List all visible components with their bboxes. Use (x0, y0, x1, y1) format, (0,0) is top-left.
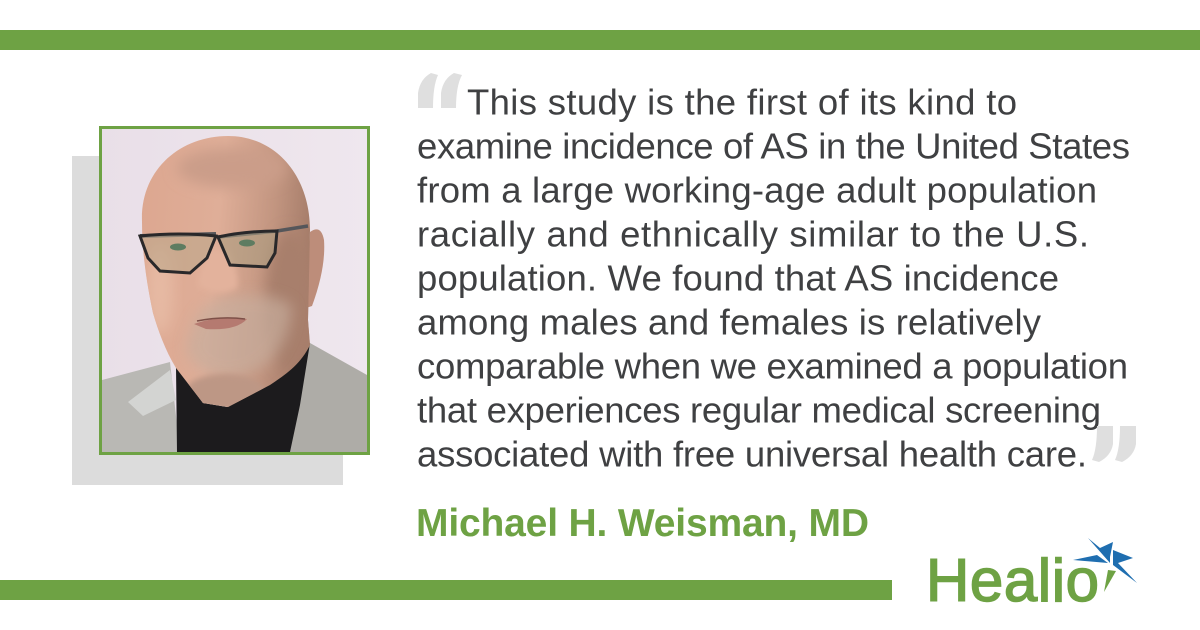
closing quotation mark (1092, 426, 1136, 462)
quote text: comparable when we examined a population (417, 346, 1128, 386)
quote text: that experiences regular medical screening (417, 390, 1101, 430)
top green bar (0, 30, 1200, 50)
opening quotation mark (418, 73, 462, 108)
quote text: from a large working-age adult population (417, 170, 1097, 210)
portrait photo of Michael H. Weisman (100, 128, 368, 454)
Healio logo (926, 538, 1137, 614)
quote text: among males and females is relatively (417, 302, 1042, 342)
quote text: racially and ethnically similar to the U.S. (417, 214, 1089, 254)
logo star (1073, 538, 1137, 592)
quote text: examine incidence of AS in the United States (417, 126, 1130, 166)
quote text (417, 82, 1130, 474)
bottom green bar (0, 580, 892, 600)
gray offset panel behind portrait (72, 156, 343, 485)
attribution name: Michael H. Weisman, MD (416, 502, 869, 545)
quote text: This study is the first of its kind to (467, 82, 1017, 122)
quote text: population. We found that AS incidence (417, 258, 1059, 298)
quote text: associated with free universal health care. (417, 434, 1087, 474)
logo wordmark: Healio (926, 547, 1099, 614)
